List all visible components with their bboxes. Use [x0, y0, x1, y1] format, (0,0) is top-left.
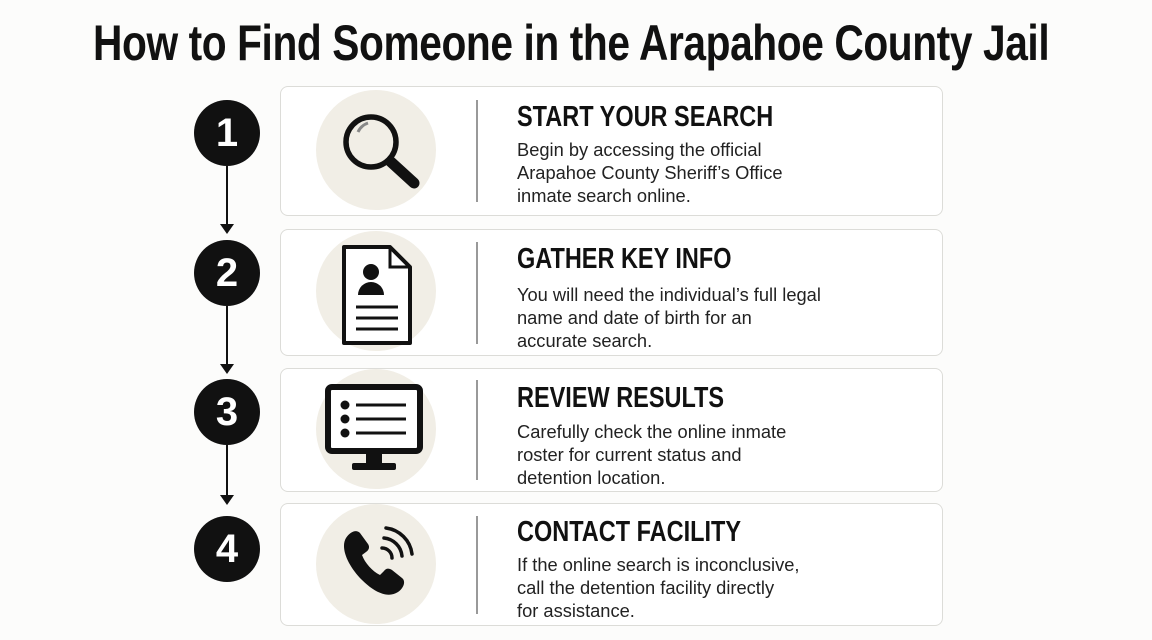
text 3: Carefully check the online inmate [517, 421, 786, 442]
text 1 [517, 139, 783, 206]
number 1 [194, 100, 260, 166]
panel: step 3 [280, 368, 943, 492]
title: How to Find Someone in the Arapahoe County Jail [93, 15, 1049, 71]
text 1: Begin by accessing the official [517, 139, 762, 160]
icon: phone [316, 504, 436, 624]
panel: step 2 [280, 229, 943, 356]
icon: monitor [316, 369, 436, 489]
icon: magnifier [316, 90, 436, 210]
text 3: detention location. [517, 467, 665, 488]
text 3 [517, 421, 786, 488]
arrow 1-2 [226, 166, 228, 232]
text 1: inmate search online. [517, 185, 691, 206]
number 3 [194, 379, 260, 445]
text 4: call the detention facility directly [517, 577, 774, 598]
panel: step 4 [280, 503, 943, 626]
text 4: for assistance. [517, 600, 635, 621]
panel: step 1 [280, 86, 943, 216]
text 4 [517, 554, 800, 621]
number 2: 2 [216, 251, 238, 295]
heading 1: START YOUR SEARCH [517, 101, 773, 133]
text 2 [517, 284, 821, 351]
number 2 [194, 240, 260, 306]
text 4: If the online search is inconclusive, [517, 554, 800, 575]
number 4: 4 [216, 527, 238, 571]
text 1: Arapahoe County Sheriff’s Office [517, 162, 783, 183]
heading 4: CONTACT FACILITY [517, 516, 741, 548]
arrow 2-3 [226, 306, 228, 372]
text 3: roster for current status and [517, 444, 742, 465]
icon: document [316, 231, 436, 351]
text 2: You will need the individual’s full legal [517, 284, 821, 305]
number 3: 3 [216, 390, 238, 434]
heading 2: GATHER KEY INFO [517, 243, 731, 275]
heading 3: REVIEW RESULTS [517, 382, 724, 414]
number 4 [194, 516, 260, 582]
text 2: name and date of birth for an [517, 307, 752, 328]
arrow 3-4 [226, 445, 228, 503]
text 2: accurate search. [517, 330, 652, 351]
number 1: 1 [216, 111, 238, 155]
